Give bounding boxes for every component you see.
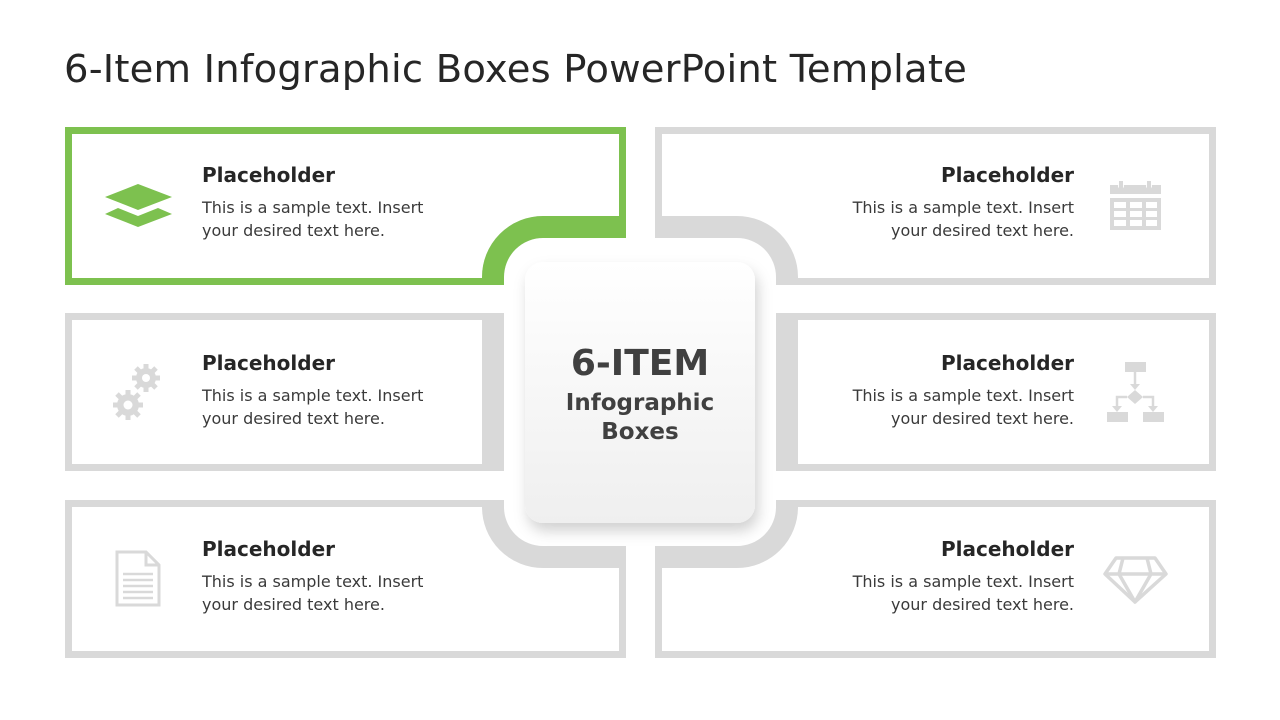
text: box 4: This is a sample text. Insert <box>853 386 1074 405</box>
text: box 4: Placeholder <box>941 351 1074 375</box>
text: box 5 <box>202 537 423 614</box>
central card: Boxes <box>601 419 679 445</box>
text: box 4 <box>852 351 1074 428</box>
ring <box>493 227 787 557</box>
diagram frame <box>65 127 1216 658</box>
icon: document <box>117 552 159 605</box>
icon: gears <box>113 364 160 420</box>
text: box 2: Placeholder <box>941 163 1074 187</box>
title: 6-Item Infographic Boxes PowerPoint Template <box>64 47 967 92</box>
text: box 6 <box>852 537 1074 614</box>
text: box 1: your desired text here. <box>202 221 385 240</box>
central card: Infographic <box>566 390 714 416</box>
text: box 3: Placeholder <box>202 351 335 375</box>
icon: calendar <box>1110 181 1161 230</box>
text: box 2 <box>852 163 1074 240</box>
text: box 1 <box>202 163 423 240</box>
text: box 3: your desired text here. <box>202 409 385 428</box>
text: box 2: This is a sample text. Insert <box>853 198 1074 217</box>
icon: diamond <box>1105 558 1166 602</box>
box outlines <box>68 130 1212 654</box>
text: box 1: This is a sample text. Insert <box>202 198 423 217</box>
text: box 6: your desired text here. <box>891 595 1074 614</box>
text: box 5: your desired text here. <box>202 595 385 614</box>
text: box 2: your desired text here. <box>891 221 1074 240</box>
text: box 5: Placeholder <box>202 537 335 561</box>
text: box 4: your desired text here. <box>891 409 1074 428</box>
text: box 3: This is a sample text. Insert <box>202 386 423 405</box>
central card: 6-ITEM <box>571 343 709 384</box>
text: box 6: Placeholder <box>941 537 1074 561</box>
text: box 1: Placeholder <box>202 163 335 187</box>
icon: flowchart <box>1107 362 1164 422</box>
text: box 5: This is a sample text. Insert <box>202 572 423 591</box>
text: box 3 <box>202 351 423 428</box>
text: box 6: This is a sample text. Insert <box>853 572 1074 591</box>
central card <box>525 262 755 523</box>
icon: layers <box>105 184 172 227</box>
